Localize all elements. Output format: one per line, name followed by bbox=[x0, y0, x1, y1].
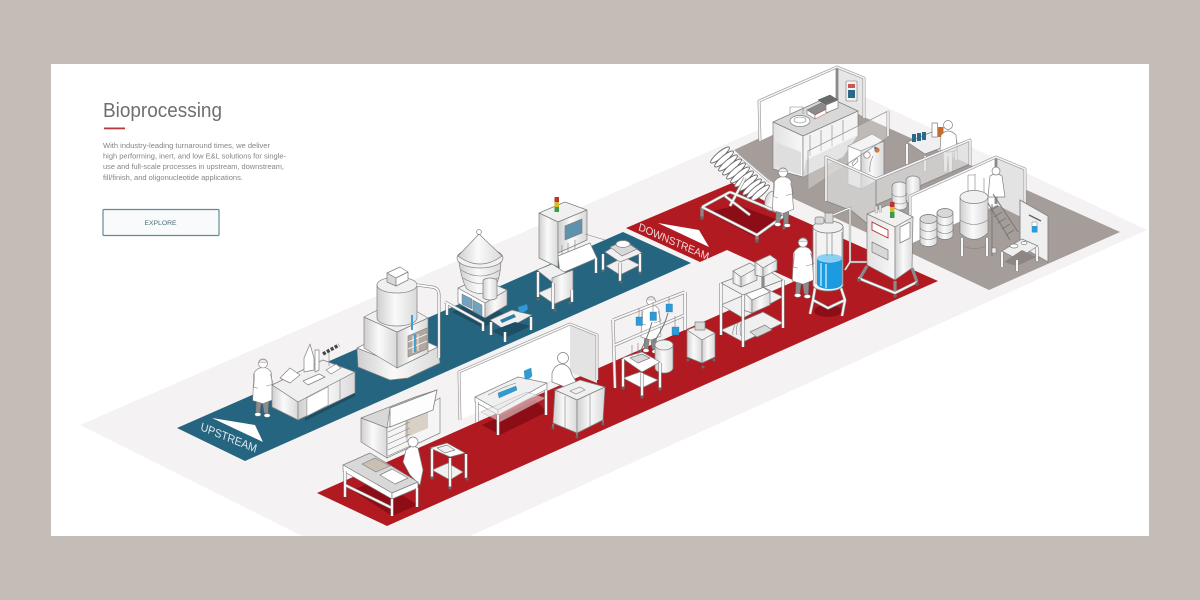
blue parts table bbox=[490, 304, 532, 342]
partition wall bbox=[459, 324, 597, 420]
signal light bbox=[890, 202, 894, 218]
description text: use and full-scale processes in upstream, downstream, bbox=[103, 164, 284, 171]
drums behind wall bbox=[892, 176, 920, 210]
description text bbox=[103, 143, 286, 182]
ladder bbox=[988, 194, 1018, 256]
pumps bbox=[733, 255, 777, 287]
description text: high performing, inert, and low E&L solutions for single- bbox=[103, 154, 286, 160]
glass bioreactor bbox=[810, 213, 845, 317]
explore button bbox=[103, 210, 219, 236]
explore button: EXPLORE bbox=[144, 220, 177, 227]
title accent bbox=[104, 128, 125, 129]
filling machine bbox=[539, 197, 605, 274]
bag frame with operator bbox=[613, 292, 685, 388]
cone centrifuge bbox=[445, 230, 507, 331]
blue upstream strip bbox=[177, 232, 691, 461]
fume hood bbox=[361, 390, 440, 458]
mixing tank with operator and ladder bbox=[960, 167, 1018, 256]
drum beside frame bbox=[655, 340, 673, 373]
spiral drum bbox=[709, 145, 781, 212]
label: downstream: DOWNSTREAM bbox=[637, 221, 710, 263]
glass partitions bbox=[808, 111, 970, 231]
white wall room bbox=[910, 157, 1025, 244]
panel with blue bag bbox=[1020, 200, 1048, 262]
label: upstream: UPSTREAM bbox=[199, 421, 258, 456]
all equipment bbox=[253, 67, 1048, 516]
right cart on blue strip bbox=[602, 240, 642, 284]
white panel bbox=[51, 64, 1149, 536]
tilting rack with spiral and operator bbox=[700, 145, 794, 243]
upstream technician bbox=[253, 359, 273, 417]
lab table with bottles and technician bbox=[907, 120, 957, 172]
large upstream bioreactor bbox=[357, 267, 440, 380]
title: Bioprocessing bbox=[103, 100, 222, 122]
red downstream strip bbox=[317, 183, 938, 526]
steel cart bbox=[552, 380, 605, 438]
small cart at hood bbox=[430, 443, 469, 490]
pipe from bioreactor to cabinet bbox=[833, 208, 867, 270]
light floor plane bbox=[80, 90, 1147, 536]
description text: With industry-leading turnaround times, we deliver bbox=[103, 143, 271, 150]
lab bench in back room bbox=[773, 95, 858, 177]
small room table bbox=[1002, 239, 1038, 271]
description text: fill/finish, and oligonucleotide applications. bbox=[103, 175, 243, 182]
wall monitor bbox=[846, 81, 857, 101]
rack contents bbox=[733, 285, 772, 337]
hood work table bbox=[343, 453, 418, 516]
drums in room bbox=[920, 208, 953, 246]
grey zone floor bbox=[734, 102, 1120, 290]
pump rack bbox=[721, 255, 783, 347]
tote on wheels bbox=[686, 322, 716, 368]
operator bbox=[988, 167, 1005, 197]
cart by frame bbox=[621, 343, 662, 399]
bench equipment bbox=[790, 95, 838, 126]
work table bbox=[475, 368, 547, 435]
control cabinet bbox=[857, 202, 919, 298]
signal light bbox=[554, 197, 559, 212]
bench instruments bbox=[280, 344, 341, 385]
hood operator bbox=[403, 437, 423, 485]
upstream bench bbox=[272, 344, 355, 421]
cabinet in grey room bbox=[848, 134, 884, 189]
bottles bbox=[912, 123, 944, 142]
back room wall bbox=[759, 67, 864, 141]
technician bbox=[940, 120, 957, 172]
gowned operator at wall bbox=[552, 352, 578, 390]
operator at bioreactor bbox=[792, 238, 814, 298]
filling cart bbox=[536, 264, 573, 312]
blue bags bbox=[636, 297, 679, 352]
